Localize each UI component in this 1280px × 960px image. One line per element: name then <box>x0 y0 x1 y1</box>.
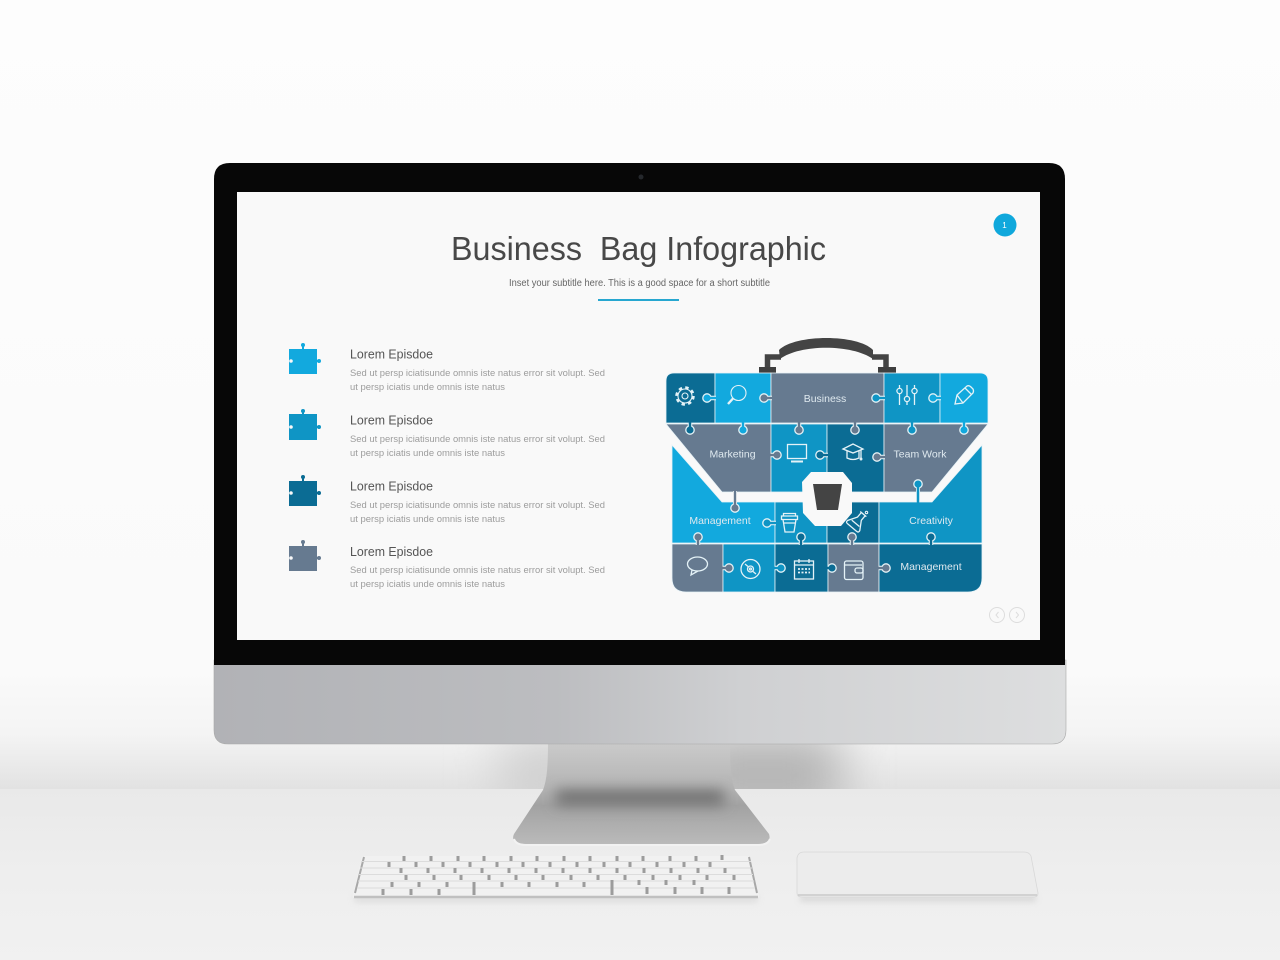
bag cell labels: Marketing <box>709 448 756 460</box>
list item 2 <box>289 409 605 459</box>
item text: Sed ut persp iciatisunde omnis iste natus error sit volupt. Sed <box>350 565 605 576</box>
bag flap cells <box>666 424 988 492</box>
icon: wallet <box>844 561 863 580</box>
item text: ut persp iciatis unde omnis iste natus <box>350 514 505 525</box>
bag cell labels: Team Work <box>894 448 947 460</box>
item text: Sed ut persp iciatisunde omnis iste natus error sit volupt. Sed <box>350 434 605 445</box>
icon: puzzle piece dark blue <box>289 475 321 506</box>
bag cell labels: Management <box>689 515 751 527</box>
icon: coffee cup <box>782 514 798 532</box>
title: Business Bag Infographic <box>451 230 826 267</box>
item heading: Lorem Episdoe <box>350 545 433 559</box>
item text <box>350 368 605 393</box>
icon: sliders <box>897 385 917 405</box>
icon: disc <box>741 560 760 578</box>
keyboard <box>353 855 759 903</box>
bag cell labels: Business <box>804 393 846 405</box>
webcam <box>638 174 644 180</box>
bag clasp <box>802 472 852 526</box>
background: wall and desk <box>0 724 1280 960</box>
icon: flask bubble <box>865 511 868 514</box>
bag cell labels: Management <box>900 561 962 573</box>
monitor chin <box>214 660 1066 744</box>
page number badge: 1 <box>1002 221 1007 230</box>
icon: speech bubble <box>688 557 708 575</box>
subtitle: Inset your subtitle here. This is a good space for a short subtitle <box>509 278 770 289</box>
navigation arrows <box>990 608 1024 622</box>
item heading: Lorem Episdoe <box>350 348 433 362</box>
icon: pencil <box>955 386 974 404</box>
trackpad <box>797 852 1038 902</box>
icon: puzzle piece blue <box>289 343 321 374</box>
monitor <box>214 163 1066 845</box>
list item 3 <box>289 475 605 525</box>
item text <box>350 434 605 459</box>
item text: ut persp iciatis unde omnis iste natus <box>350 579 505 590</box>
screen <box>237 192 1040 640</box>
icon: flask <box>846 509 869 533</box>
icon: graduation cap <box>843 444 863 460</box>
icon: bag handle <box>759 338 896 377</box>
bag cell labels: Creativity <box>909 515 954 527</box>
page number badge <box>994 214 1016 236</box>
item heading: Lorem Episdoe <box>350 414 433 428</box>
bag icons <box>677 385 974 580</box>
item text <box>350 500 605 525</box>
connector tabs: dark blue <box>686 422 935 572</box>
icon: gear <box>677 388 693 404</box>
item text: Sed ut persp iciatisunde omnis iste natus error sit volupt. Sed <box>350 368 605 379</box>
icon: computer monitor <box>788 444 806 462</box>
item text <box>350 565 605 590</box>
bag bottom row cells <box>672 544 982 592</box>
item text: ut persp iciatis unde omnis iste natus <box>350 382 505 393</box>
item text: ut persp iciatis unde omnis iste natus <box>350 448 505 459</box>
icon: puzzle piece slate <box>289 540 321 571</box>
list item 1 <box>289 343 605 393</box>
item heading: Lorem Episdoe <box>350 480 433 494</box>
connector tabs: light blue <box>703 394 968 434</box>
connector tabs: mid blue <box>763 394 922 572</box>
monitor stand <box>513 742 770 845</box>
bag top row cells <box>666 373 988 423</box>
bag middle row cells <box>672 445 982 543</box>
icon: puzzle piece mid blue <box>289 409 321 440</box>
item text: Sed ut persp iciatisunde omnis iste natus error sit volupt. Sed <box>350 500 605 511</box>
connector tabs: slate <box>694 394 890 572</box>
monitor bezel <box>214 163 1065 665</box>
icon: calendar <box>794 559 814 579</box>
bag cell labels <box>689 393 962 573</box>
list item 4 <box>289 540 605 590</box>
icon: magnifier <box>728 386 746 404</box>
briefcase infographic <box>666 338 988 592</box>
